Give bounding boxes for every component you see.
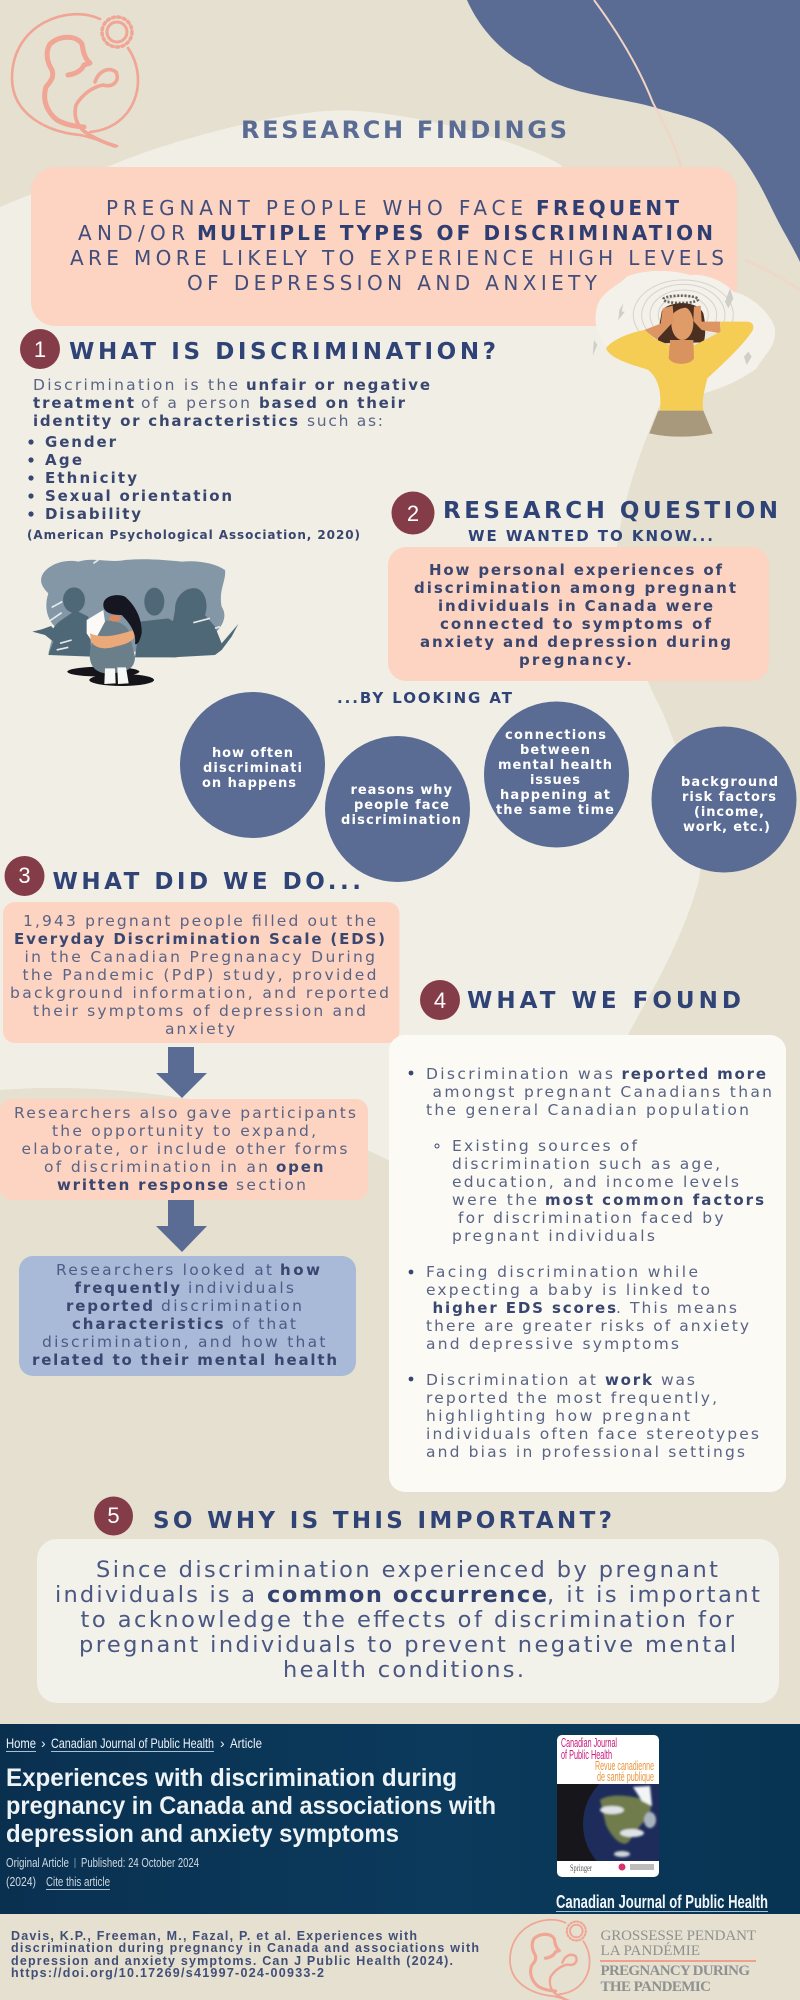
circle: how often: discriminati: [203, 761, 302, 776]
circle: connections: connections: [505, 728, 606, 743]
text: study name: [600, 1928, 756, 1995]
panel: research question: [388, 547, 769, 681]
journal cover: Springer: [570, 1863, 592, 1873]
citation: article reference: [11, 1929, 479, 1980]
banner: journal article header: ›: [41, 1735, 46, 1751]
journal cover: Canadian Journal: [561, 1735, 617, 1750]
panel: findings: expecting a baby is linked to: [426, 1281, 710, 1299]
heading: what did we do: [4, 856, 361, 896]
heading: research question: 2: [407, 501, 419, 526]
panel: method step 3: individuals: [188, 1279, 294, 1297]
panel: method step 3: characteristics: [72, 1315, 224, 1333]
panel: method step 1: background information, and reported: [10, 984, 389, 1002]
panel: method step 1: their symptoms of depression and: [33, 1002, 366, 1020]
panel: method step 2: of discrimination in an: [44, 1158, 268, 1176]
list: characteristics: Ethnicity: [45, 469, 137, 487]
panel: method step 1: anxiety: [165, 1020, 235, 1038]
circle: how often: how often: [212, 746, 293, 761]
panel: findings: most common factors: [545, 1191, 764, 1209]
banner: journal article header: depression and anxiety symptoms: [6, 1820, 399, 1848]
circle: reasons why: people face: [354, 798, 449, 813]
citation: article reference: Davis, K.P., Freeman, M., Fazal, P. et al. Experiences with: [11, 1929, 417, 1943]
heading: what did we do: WHAT DID WE DO...: [52, 869, 361, 895]
panel: method step 3: discrimination: [161, 1297, 302, 1315]
panel: method step 2: section: [236, 1176, 306, 1194]
banner: journal article header: pregnancy in Canada and associations with: [6, 1792, 496, 1820]
heading: so why is this important: SO WHY IS THIS IMPORTANT?: [153, 1508, 612, 1534]
heading: what is discrimination: 1: [34, 337, 46, 362]
text: definition of discrimination: unfair or negative: [246, 376, 430, 394]
panel: findings: . This means: [616, 1299, 737, 1317]
panel: findings: individuals often face stereotypes: [426, 1425, 759, 1443]
panel: findings: were the: [452, 1191, 537, 1209]
circle: background risk factors: risk factors: [682, 790, 776, 805]
panel: key message: OF DEPRESSION AND ANXIETY: [187, 271, 598, 295]
subheading: we wanted to know: WE WANTED TO KNOW...: [468, 527, 713, 545]
journal cover: [557, 1735, 659, 1877]
panel: method step 1: Everyday Discrimination Scale (EDS): [14, 930, 385, 948]
panel: research question: individuals in Canada were: [438, 597, 713, 615]
circle: background risk factors: (income,: [694, 805, 764, 820]
panel: method step 3: how: [280, 1261, 320, 1279]
list: characteristics: Disability: [45, 505, 141, 523]
panel: findings: was: [661, 1371, 695, 1389]
list: characteristics: Age: [45, 451, 82, 469]
panel: method step 3: discrimination, and how that: [42, 1333, 326, 1351]
circle: how often: on happens: [202, 776, 296, 791]
icon: stressed woman holding her head: [593, 271, 775, 437]
panel: importance: common occurrence: [267, 1582, 547, 1608]
heading: what is discrimination: [20, 329, 496, 369]
panel: findings: amongst pregnant Canadians than: [432, 1083, 772, 1101]
icon: footer logo: [510, 1920, 590, 2000]
circle: background risk factors: background: [681, 775, 778, 790]
text: study name: THE PANDEMIC: [600, 1979, 711, 1995]
panel: method step 3: reported: [66, 1297, 153, 1315]
panel: method step 1: the Pandemic (PdP) study, provided: [22, 966, 376, 984]
panel: findings: work: [605, 1371, 653, 1389]
panel: importance: to acknowledge the effects of discrimination for: [80, 1607, 735, 1633]
circle: how often: [180, 692, 325, 838]
panel: method step 2: open: [276, 1158, 324, 1176]
banner: journal article header: [0, 1724, 800, 1914]
panel: research question: How personal experiences of: [429, 561, 722, 579]
panel: key message: ARE MORE LIKELY TO EXPERIENCE HIGH LEVELS: [70, 246, 724, 270]
panel: findings: reported the most frequently,: [426, 1389, 717, 1407]
panel: findings: discrimination such as age,: [452, 1155, 720, 1173]
panel: findings: Discrimination was: [426, 1065, 613, 1083]
text: definition of discrimination: Discrimination is the: [33, 376, 238, 394]
panel: findings: higher EDS scores: [432, 1299, 616, 1317]
circle: background risk factors: [652, 726, 796, 872]
arrow: step 2 to step 3: [156, 1200, 207, 1252]
list: characteristics: Gender: [45, 433, 117, 451]
text: definition of discrimination: of a person: [141, 394, 250, 412]
panel: findings: Discrimination at: [426, 1371, 596, 1389]
banner: journal article header: ›: [220, 1735, 225, 1751]
circle: connections: [484, 702, 629, 848]
panel: importance: pregnant individuals to prevent negative mental: [79, 1632, 736, 1658]
panel: method step 2: the opportunity to expand,: [52, 1122, 316, 1140]
panel: findings: education, and income levels: [452, 1173, 739, 1191]
panel: findings: there are greater risks of anxiety: [426, 1317, 749, 1335]
panel: findings: the general Canadian population: [426, 1101, 749, 1119]
panel: key message: MULTIPLE TYPES OF DISCRIMINATION: [197, 221, 713, 245]
panel: method step 3: related to their mental health: [32, 1351, 337, 1369]
panel: method step 3: of that: [232, 1315, 296, 1333]
heading: what we found: 4: [434, 988, 446, 1013]
panel: findings: Existing sources of: [452, 1137, 638, 1155]
circle: reasons why: discrimination: [341, 813, 461, 828]
heading: what did we do: 3: [18, 863, 31, 888]
journal cover: of Public Health: [561, 1747, 612, 1762]
list: characteristics: [28, 433, 232, 523]
panel: method step 1: in the Canadian Pregnanacy During: [24, 948, 375, 966]
panel: research question: pregnancy.: [519, 651, 632, 669]
panel: findings: pregnant individuals: [452, 1227, 655, 1245]
circle: reasons why: reasons why: [350, 783, 453, 798]
banner: journal article header: Published: 24 October 2024: [81, 1855, 199, 1870]
icon: pregnancy during the pandemic logo: [12, 14, 138, 146]
panel: method step 2: [0, 1099, 368, 1200]
panel: method step 2: elaborate, or include other forms: [22, 1140, 348, 1158]
circle: connections: the same time: [496, 803, 614, 818]
circle: connections: mental health: [498, 758, 612, 773]
heading: research question: [392, 492, 778, 534]
panel: method step 1: [3, 902, 400, 1043]
panel: key message: AND/OR: [78, 221, 185, 245]
banner: journal article header: (2024): [6, 1874, 36, 1889]
panel: importance: [37, 1539, 779, 1703]
heading: so why is this important: 5: [107, 1503, 120, 1528]
text: definition of discrimination: based on their: [259, 394, 406, 412]
panel: findings: for discrimination faced by: [458, 1209, 724, 1227]
panel: research question: connected to symptoms of: [440, 615, 711, 633]
list: characteristics: Sexual orientation: [45, 487, 232, 505]
banner: journal article header: Home: [6, 1735, 36, 1751]
heading: research question: RESEARCH QUESTION: [443, 498, 778, 524]
text: study name: LA PANDÉMIE: [600, 1942, 700, 1959]
text: study name: GROSSESSE PENDANT: [600, 1928, 756, 1944]
heading: what is discrimination: WHAT IS DISCRIMINATION?: [69, 339, 496, 365]
heading: so why is this important: [94, 1496, 612, 1536]
banner: journal article header: Cite this article: [46, 1874, 110, 1889]
journal cover: Revue canadienne: [595, 1758, 654, 1773]
panel: method step 2: Researchers also gave participants: [14, 1104, 356, 1122]
circle: connections: between: [520, 743, 590, 758]
banner: journal article header: Article: [230, 1735, 262, 1751]
title: RESEARCH FINDINGS: [241, 116, 567, 144]
circle: connections: issues: [530, 773, 580, 788]
panel: importance: Since discrimination experienced by pregnant: [96, 1557, 718, 1583]
banner: journal article header: Experiences with discrimination during: [6, 1764, 457, 1792]
panel: importance: health conditions.: [283, 1657, 524, 1683]
panel: method step 3: [19, 1256, 356, 1376]
circle: background risk factors: work, etc.): [683, 820, 770, 835]
text: definition of discrimination: treatment: [33, 394, 134, 412]
panel: findings: [389, 1035, 786, 1492]
icon: crouching woman surrounded by silhouettes: [32, 559, 238, 686]
panel: importance: , it is important: [547, 1582, 760, 1608]
banner: journal article header: Original Article: [6, 1855, 69, 1870]
panel: method step 3: frequently: [74, 1279, 180, 1297]
panel: findings: and depressive symptoms: [426, 1335, 679, 1353]
panel: research question: discrimination among pregnant: [414, 579, 736, 597]
text: definition of discrimination: [33, 376, 430, 430]
panel: findings: reported more: [622, 1065, 766, 1083]
circle: reasons why: [325, 736, 470, 882]
banner: journal article header: Canadian Journal of Public Health: [51, 1735, 214, 1751]
subheading: by looking at: ...BY LOOKING AT: [337, 689, 513, 707]
panel: method step 1: 1,943 pregnant people filled out the: [23, 912, 376, 930]
citation: APA: (American Psychological Association, 2020): [27, 528, 360, 542]
journal cover: de santé publique: [597, 1769, 654, 1784]
heading: what we found: WHAT WE FOUND: [467, 988, 741, 1014]
citation: article reference: https://doi.org/10.17269/s41997-024-00933-2: [11, 1966, 324, 1980]
text: study name: PREGNANCY DURING: [600, 1963, 750, 1979]
panel: findings: Facing discrimination while: [426, 1263, 698, 1281]
panel: findings: and bias in professional settings: [426, 1443, 745, 1461]
citation: article reference: depression and anxiety symptoms. Can J Public Health (2024).: [11, 1954, 453, 1968]
heading: what we found: [420, 980, 741, 1020]
panel: key message: PREGNANT PEOPLE WHO FACE: [106, 196, 523, 220]
panel: importance: individuals is a: [55, 1582, 255, 1608]
panel: method step 2: written response: [57, 1176, 228, 1194]
citation: article reference: discrimination during pregnancy in Canada and associations with: [11, 1941, 479, 1955]
text: definition of discrimination: such as:: [307, 412, 383, 430]
panel: key message: [31, 167, 737, 326]
circle: connections: happening at: [500, 788, 610, 803]
arrow: step 1 to step 2: [156, 1047, 207, 1098]
panel: research question: anxiety and depression during: [420, 633, 731, 651]
panel: key message: FREQUENT: [536, 196, 679, 220]
text: definition of discrimination: identity or characteristics: [33, 412, 298, 430]
panel: findings: highlighting how pregnant: [426, 1407, 690, 1425]
panel: method step 3: Researchers looked at: [56, 1261, 272, 1279]
